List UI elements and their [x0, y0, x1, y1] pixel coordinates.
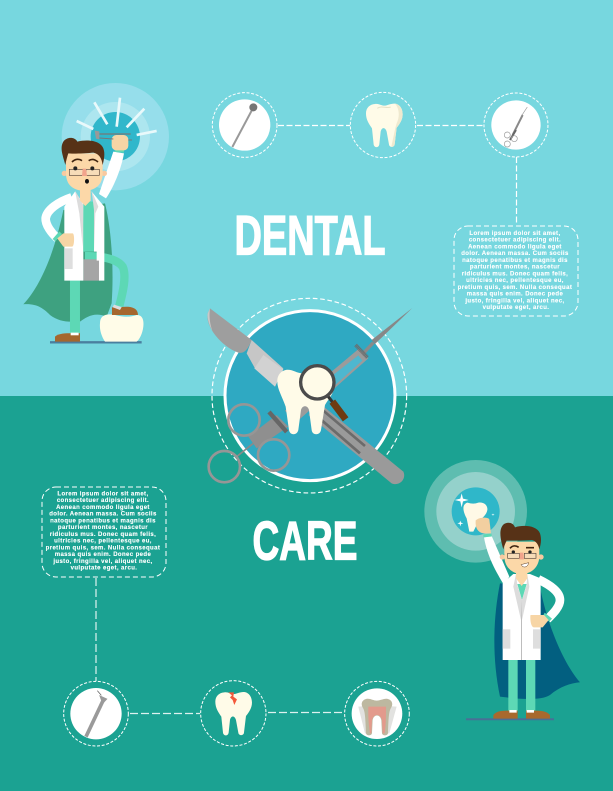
callout: top text box: vulputate eget, arcu. [483, 305, 549, 311]
left doctor character [23, 83, 169, 342]
callout: top text box: natoque penatibus et magnis dis [462, 258, 568, 264]
callout: bottom text box: parturient montes, nascetur [58, 525, 148, 531]
callout: top text box: pretium quis, sem. Nulla consequat [458, 285, 572, 291]
lab coat [46, 135, 128, 281]
callout: top text box: Lorem ipsum dolor sit amet, [469, 231, 561, 237]
callout: bottom text box: consectetuer adipiscing elit. [57, 498, 149, 504]
callout: bottom text box: pretium quis, sem. Nulla consequat [46, 546, 160, 552]
shoes and ground [466, 710, 554, 719]
icon: tooth cross-section [345, 681, 409, 746]
icon: tooth [350, 92, 416, 158]
callout: top text box: parturient montes, nascetur [470, 265, 560, 271]
connector lines bottom [96, 578, 345, 714]
halo with tooth [424, 460, 527, 563]
forceps tool [95, 131, 132, 140]
callout: bottom text box [42, 487, 166, 577]
callout: top text box: ultricies nec, pellentesque eu, [466, 278, 564, 284]
central instruments emblem [207, 298, 412, 493]
right doctor character [424, 460, 580, 719]
callout: top text box: consectetuer adipiscing elit. [469, 238, 561, 244]
connector lines top [278, 126, 516, 225]
callout: top text box: Aenean commodo ligula eget [468, 244, 562, 250]
callout: top text box: ridiculus mus. Donec quam felis, [462, 272, 568, 278]
callout: bottom text box: ridiculus mus. Donec quam felis, [50, 532, 156, 538]
halo with rays [62, 83, 169, 190]
callout: bottom text box: justo, fringilla vel, aliquet nec, [52, 559, 153, 565]
callout: bottom text box: ultricies nec, pellentesque eu, [54, 539, 152, 545]
lab coat [476, 518, 560, 660]
callout: top text box: justo, fringilla vel, aliquet nec, [464, 298, 565, 304]
legs [75, 256, 124, 333]
icon: dental mirror [212, 93, 277, 157]
title: CARE: CARE [252, 510, 358, 572]
callout: bottom text box: Lorem ipsum dolor sit amet, [57, 492, 149, 498]
callout: bottom text box: Aenean commodo ligula eget [56, 505, 150, 511]
scalpel [207, 308, 404, 484]
title: DENTAL: DENTAL [234, 204, 386, 266]
icon: dental probe [64, 681, 128, 746]
callout: top text box: massa quis enim. Donec pede [467, 292, 563, 298]
cape [23, 203, 113, 322]
callout: top text box: dolor. Aenean massa. Cum sociis [461, 251, 569, 257]
callout: bottom text box: massa quis enim. Donec pede [55, 552, 151, 558]
legs [508, 659, 535, 712]
shoes and ground [50, 305, 143, 342]
head [62, 138, 107, 191]
callout: bottom text box: vulputate eget, arcu. [71, 566, 137, 572]
dashed ring and blue disc [212, 298, 407, 493]
icon: syringe and forceps [484, 93, 548, 157]
callout: top text box [454, 226, 578, 316]
callout: bottom text box: dolor. Aenean massa. Cum sociis [49, 512, 157, 518]
icon: cracked tooth [201, 681, 266, 746]
magnifying glass [301, 366, 346, 419]
syringe [209, 308, 412, 482]
cape [494, 583, 580, 699]
tooth [277, 370, 334, 434]
callout: bottom text box: natoque penatibus et magnis dis [50, 518, 156, 524]
head [500, 523, 544, 574]
